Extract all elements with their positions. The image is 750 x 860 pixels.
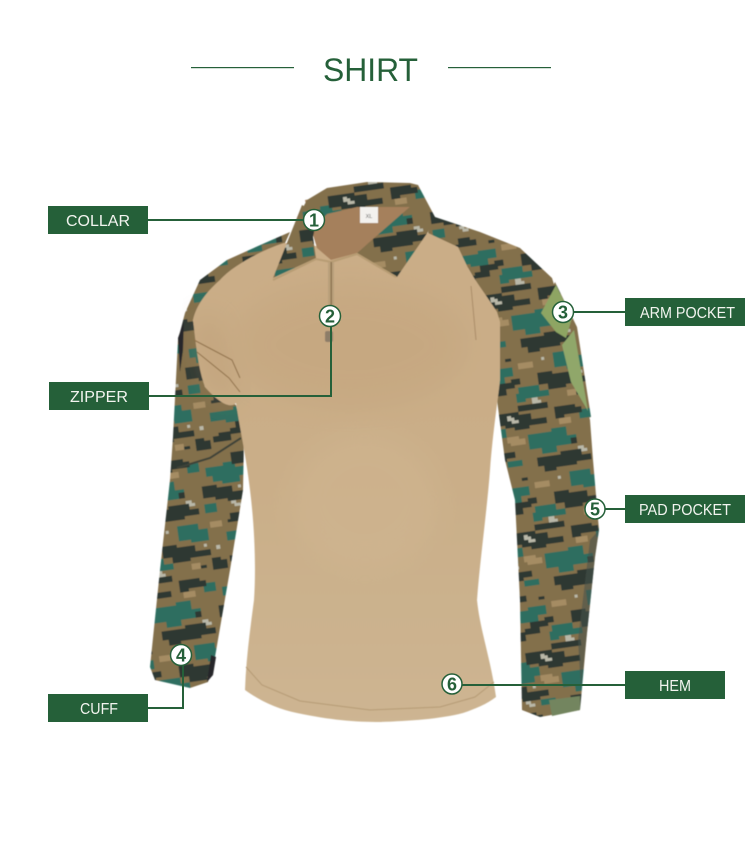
title: SHIRT <box>323 52 418 88</box>
zipper <box>325 262 334 342</box>
collar inside <box>305 185 412 260</box>
callout 2: zipper <box>49 306 340 410</box>
left cuff strap <box>207 655 216 682</box>
callout 1: collar: 1 <box>309 210 319 230</box>
left sleeve pocket <box>178 321 184 372</box>
right collar leaf <box>357 185 435 277</box>
cuff velcro <box>549 696 580 716</box>
callout 6: hem: HEM <box>659 678 691 695</box>
callout 6: hem: 6 <box>447 674 457 694</box>
callout 4: cuff <box>48 644 192 722</box>
callout 4: cuff: CUFF <box>80 701 118 718</box>
left collar leaf <box>273 205 318 278</box>
collar back <box>300 182 424 230</box>
arm seam <box>194 340 240 392</box>
left sleeve <box>150 232 290 688</box>
right sleeve <box>428 216 599 717</box>
arm shading <box>196 318 238 404</box>
left sleeve seam <box>177 438 241 468</box>
callout 2: zipper: ZIPPER <box>70 389 128 406</box>
arm pocket <box>540 282 591 420</box>
belly highlight <box>290 430 440 570</box>
callout 2: zipper: 2 <box>325 306 335 326</box>
callout 5: pad pocket: PAD POCKET <box>639 502 731 519</box>
torso <box>193 233 500 722</box>
callout 1: collar <box>48 206 324 234</box>
chest shading <box>235 285 465 405</box>
callout 3: arm pocket: 3 <box>558 302 568 322</box>
callout 5: pad pocket <box>585 495 745 523</box>
collar edge stitch <box>273 254 396 280</box>
callout 5: pad pocket: 5 <box>590 500 600 520</box>
callout 1: collar: COLLAR <box>66 213 130 230</box>
hem stitch <box>246 667 494 710</box>
shirt illustration: XL <box>366 214 372 220</box>
callout 6: hem <box>442 671 725 699</box>
size tag <box>360 207 378 223</box>
right chest seam <box>471 286 476 340</box>
callout 3: arm pocket <box>552 298 745 326</box>
right sleeve outer shadow <box>578 530 599 690</box>
callout 3: arm pocket: ARM POCKET <box>640 305 735 322</box>
callout 4: cuff: 4 <box>176 646 186 666</box>
shirt illustration <box>150 182 599 722</box>
